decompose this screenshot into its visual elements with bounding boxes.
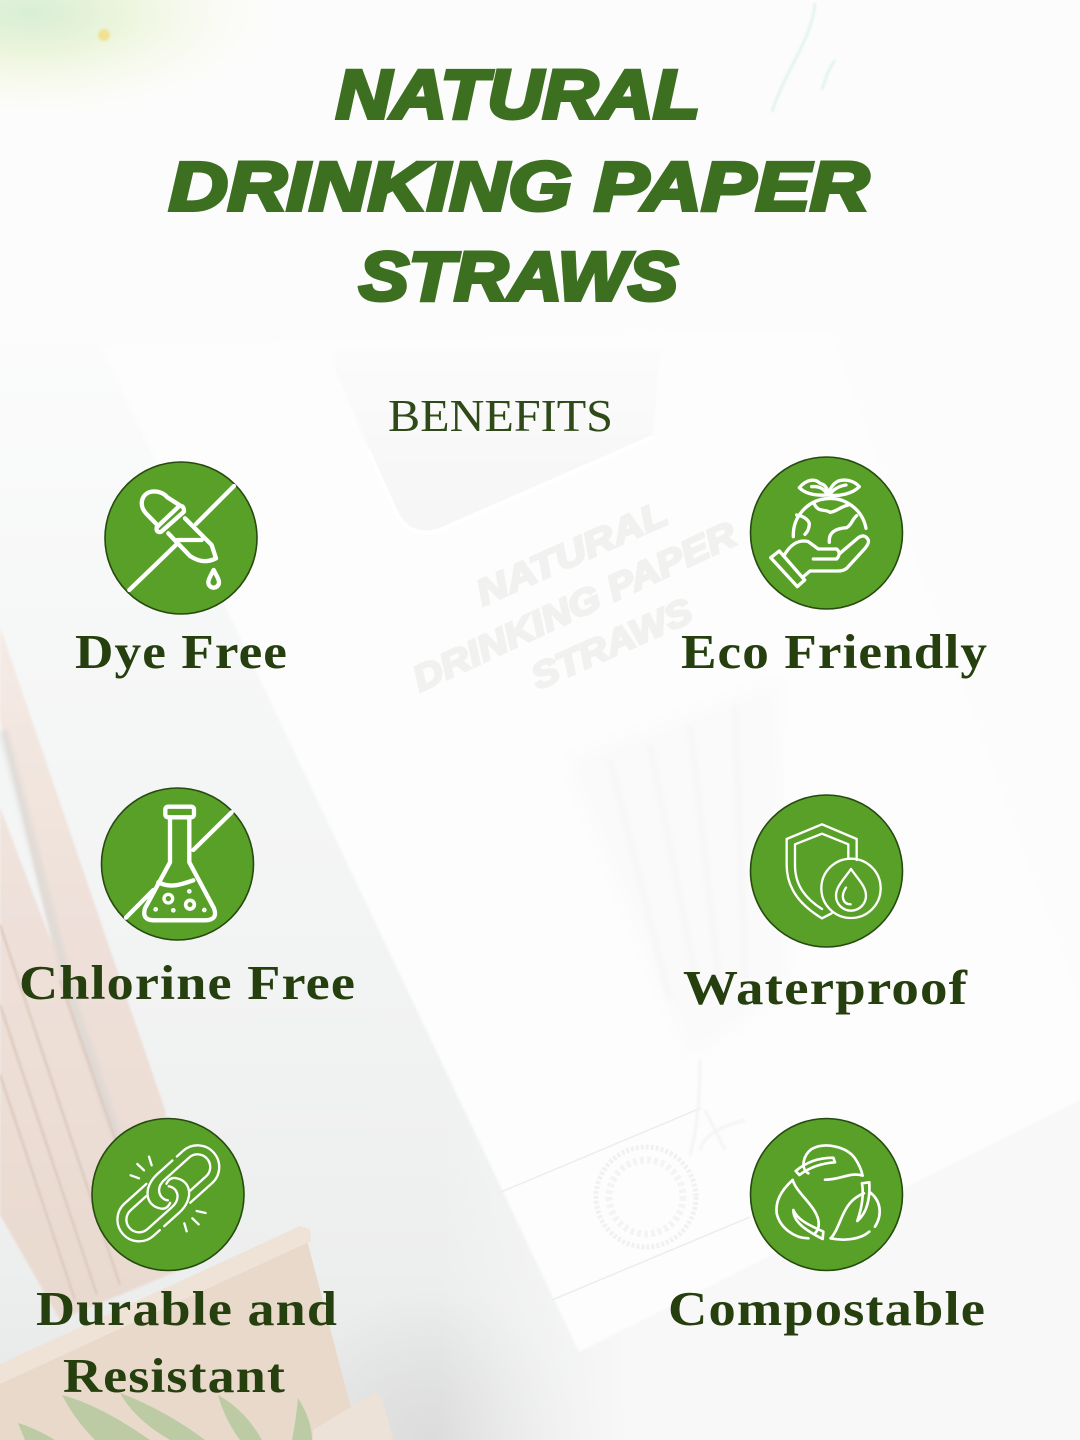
icon: recycling leaves: [750, 1118, 902, 1270]
title: NATURAL: [336, 56, 700, 133]
pack faint title: DRINKING PAPER: [406, 513, 742, 699]
label: Eco Friendly: [681, 624, 988, 679]
icon: chain link: [92, 1118, 244, 1270]
benefit: dye free: [75, 462, 288, 679]
label: Dye Free: [75, 624, 288, 679]
pack faint straws: [565, 680, 790, 1060]
pack: [100, 330, 1080, 1352]
benefit: durable and resistant: [36, 1118, 338, 1403]
heading: benefits: BENEFITS: [388, 390, 613, 441]
paper straws: [0, 627, 180, 1320]
leaves: [18, 1393, 312, 1440]
benefit: eco friendly: [681, 457, 988, 679]
wall shadow: [280, 1290, 580, 1440]
pack seal: [596, 1147, 696, 1247]
label: Chlorine Free: [19, 955, 356, 1010]
benefit: chlorine free: [19, 788, 356, 1010]
label: Durable and: [36, 1281, 338, 1336]
title: [169, 56, 869, 315]
label: Waterproof: [683, 960, 968, 1015]
icon: hand holding globe: [750, 457, 902, 609]
label: Resistant: [63, 1348, 286, 1403]
benefit: compostable: [668, 1118, 986, 1336]
benefit: waterproof: [683, 795, 968, 1015]
label: [36, 1281, 338, 1403]
label: Compostable: [668, 1281, 986, 1336]
icon: shield and water drop: [750, 795, 902, 947]
pack window: [335, 350, 660, 532]
pack faint title: STRAWS: [525, 590, 698, 697]
icon: crossed-out flask: [102, 788, 254, 940]
title: STRAWS: [359, 238, 678, 315]
icon: crossed-out dropper: [105, 462, 257, 614]
title: DRINKING PAPER: [169, 148, 869, 225]
top watercolour stain: [0, 0, 835, 130]
pack faint title: NATURAL: [470, 492, 674, 613]
paper cups: [0, 1226, 393, 1440]
